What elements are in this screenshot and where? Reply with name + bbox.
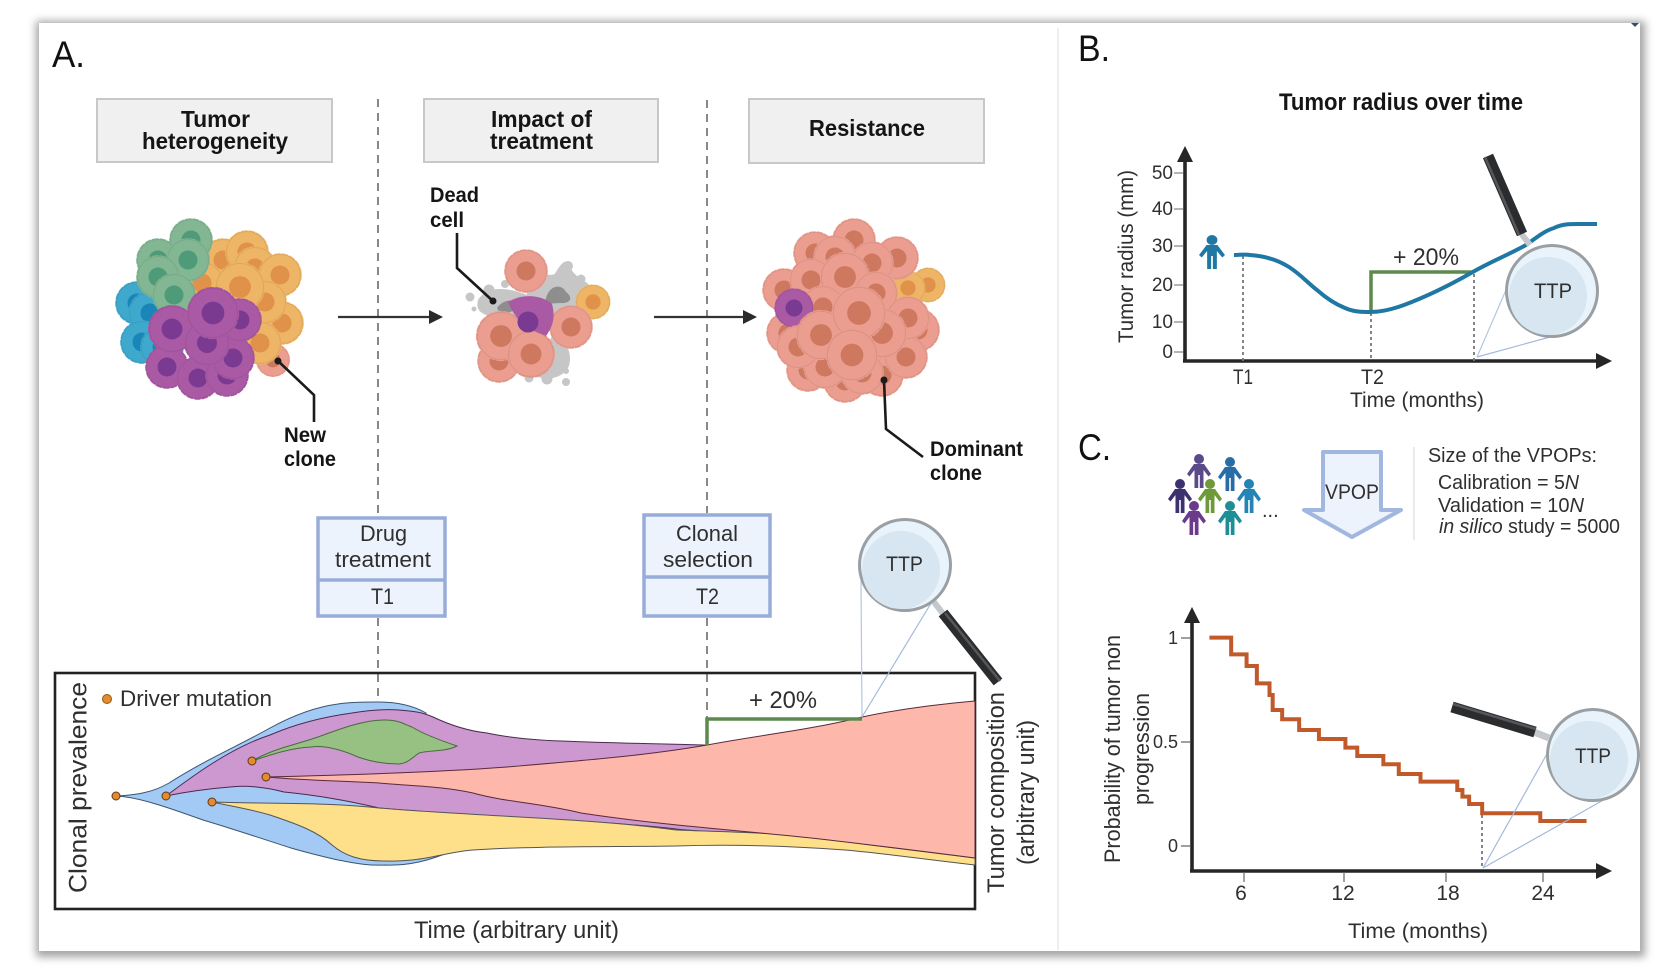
heading: impact of treatment	[424, 99, 658, 162]
arrow: heterogeneity to treatment	[338, 310, 443, 324]
+20% bracket in panel A	[707, 687, 862, 745]
box: clonal selection T2: selection	[663, 547, 753, 572]
y axis ticks and labels: 30	[1152, 236, 1173, 257]
heading: impact of treatment: treatment	[490, 128, 593, 154]
clone: yellow	[212, 802, 975, 865]
icon: virtual patients: ...	[1262, 500, 1279, 522]
x axis label: Time (months)	[1348, 920, 1488, 943]
tumor illustration: resistant	[764, 220, 944, 402]
axis label: tumor composition: Tumor composition	[983, 692, 1010, 893]
y axis ticks and labels: 50	[1152, 163, 1173, 184]
heading: resistance	[749, 99, 984, 163]
magnifier: TTP in panel A: TTP	[886, 553, 923, 576]
heading: resistance: Resistance	[809, 115, 925, 141]
arrow: treatment to resistance	[654, 310, 757, 324]
x axis tick labels: 6	[1235, 882, 1247, 905]
text block: size of VPOPs	[1428, 445, 1620, 538]
y axis tick labels	[1153, 628, 1178, 856]
magnifier: TTP in panel B: TTP	[1534, 280, 1572, 303]
box: drug treatment T1: T1	[371, 584, 394, 609]
x axis labels: Time (months)	[1350, 389, 1484, 412]
x axis tick labels: 24	[1531, 882, 1555, 905]
heading: tumor heterogeneity: heterogeneity	[142, 128, 288, 154]
heading: impact of treatment: Impact of	[491, 106, 592, 132]
callout: dominant clone	[880, 376, 1023, 485]
axis label: arbitrary unit: (arbitrary unit)	[1013, 720, 1040, 865]
y axis label: progression	[1129, 693, 1154, 805]
callout: dead cell	[430, 184, 496, 304]
magnifier: TTP in panel B	[1477, 156, 1598, 357]
panel B: tumor radius over time	[1078, 28, 1612, 412]
x axis tick labels: 12	[1331, 882, 1355, 905]
panel A: clonal evolution	[52, 34, 1040, 944]
text block: size of VPOPs: in silico study = 5000	[1439, 516, 1620, 538]
axes	[1177, 146, 1612, 369]
box: drug treatment T1	[318, 518, 445, 616]
fish plot frame	[55, 673, 975, 909]
panel letter A: A.	[52, 34, 85, 75]
callout: dominant clone: clone	[930, 462, 982, 485]
callout: new clone: clone	[284, 448, 336, 471]
heading: tumor heterogeneity	[97, 99, 332, 162]
callout: dead cell: Dead	[430, 184, 479, 207]
x axis labels: T1	[1233, 366, 1253, 389]
axis label: time arbitrary unit: Time (arbitrary unit)	[414, 917, 619, 944]
+20% bracket in panel B: + 20%	[1393, 244, 1459, 271]
y axis tick labels: 0.5	[1153, 732, 1178, 752]
text block: size of VPOPs: Validation = 10N	[1438, 495, 1585, 517]
clone: purple	[166, 710, 818, 838]
box: drug treatment T1: treatment	[335, 547, 431, 572]
clone: green	[252, 720, 457, 764]
magnifier: TTP in panel C	[1452, 704, 1638, 868]
panel letter C: C.	[1078, 427, 1111, 468]
y axis label: Tumor radius (mm)	[1115, 170, 1138, 343]
icon: virtual patients	[1168, 454, 1279, 535]
text block: size of VPOPs: Calibration = 5N	[1438, 472, 1580, 494]
box: clonal selection T2	[644, 515, 770, 616]
non-progression step curve	[1209, 638, 1587, 821]
magnifier: TTP in panel C: TTP	[1575, 745, 1611, 768]
callout: new clone: New	[284, 424, 327, 447]
tumor illustration: treated with dead cells	[466, 250, 609, 386]
y axis ticks and labels: 0	[1162, 342, 1173, 363]
x axis tick labels	[1235, 882, 1555, 905]
panel C: virtual populations and survival	[1078, 427, 1638, 943]
x axis labels	[1233, 366, 1484, 412]
arrow: VPOP	[1304, 452, 1401, 537]
y axis label: Probability of tumor non	[1100, 635, 1125, 863]
callout: new clone	[274, 358, 336, 471]
legend: driver mutation: Driver mutation	[120, 686, 272, 711]
box: clonal selection T2: Clonal	[676, 521, 738, 546]
chart axes	[1181, 607, 1612, 882]
y axis tick labels: 0	[1168, 836, 1178, 856]
tumor radius curve	[1234, 224, 1597, 312]
axis label: clonal prevalence: Clonal prevalence	[64, 682, 92, 893]
+20% bracket in panel B	[1371, 244, 1471, 312]
icon: patient	[1199, 235, 1225, 269]
box: clonal selection T2: T2	[696, 584, 719, 609]
driver mutation dots	[112, 757, 270, 806]
clone: founder blue	[116, 702, 450, 865]
tumor illustration: heterogeneous	[116, 220, 302, 398]
chart title: Tumor radius over time	[1279, 89, 1523, 116]
y axis label	[1100, 635, 1154, 863]
x axis tick labels: 18	[1436, 882, 1460, 905]
text block: size of VPOPs: Size of the VPOPs:	[1428, 445, 1597, 467]
y axis ticks and labels: 40	[1152, 199, 1173, 220]
panel letter B: B.	[1078, 28, 1110, 69]
y axis tick labels: 1	[1168, 628, 1178, 648]
y axis ticks and labels: 20	[1152, 275, 1173, 296]
heading: tumor heterogeneity: Tumor	[181, 106, 250, 132]
y axis ticks and labels: 10	[1152, 312, 1173, 333]
+20% bracket in panel A: + 20%	[749, 687, 817, 714]
clone: dominant pink	[266, 701, 975, 858]
magnifier: TTP in panel A	[860, 520, 1000, 717]
box: drug treatment T1: Drug	[360, 521, 407, 546]
y axis ticks and labels	[1152, 163, 1183, 363]
x axis labels: T2	[1361, 366, 1384, 389]
fish plot: clonal evolution areas	[112, 701, 975, 865]
arrow: VPOP: VPOP	[1325, 481, 1379, 504]
callout: dead cell: cell	[430, 209, 464, 232]
callout: dominant clone: Dominant	[930, 438, 1023, 461]
